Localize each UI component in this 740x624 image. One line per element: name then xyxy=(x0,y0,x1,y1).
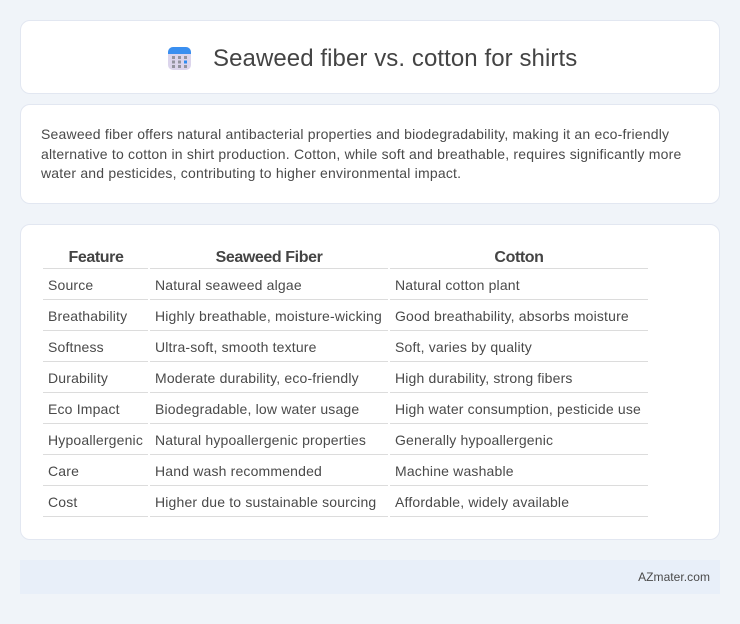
icon: calendar xyxy=(168,47,191,70)
header row xyxy=(68,249,544,266)
row: Softness: Ultra-soft, smooth texture xyxy=(155,339,317,355)
footer brand: AZmater.com xyxy=(638,570,710,584)
title: Seaweed fiber vs. cotton for shirts xyxy=(213,45,577,72)
row: Softness xyxy=(48,339,532,355)
footer bar xyxy=(20,560,720,594)
row: Breathability: Good breathability, absorbs moisture xyxy=(395,308,629,324)
panel: comparison table xyxy=(20,224,720,540)
row: Breathability: Breathability xyxy=(48,308,127,324)
row: Source: Source xyxy=(48,277,93,293)
row: Source xyxy=(48,277,520,293)
row: Care: Machine washable xyxy=(395,463,514,479)
row: Source: Natural seaweed algae xyxy=(155,277,302,293)
row: Breathability xyxy=(48,308,629,324)
row: Durability: Moderate durability, eco-friendly xyxy=(155,370,359,386)
summary paragraph xyxy=(41,126,681,181)
header row: Cotton xyxy=(494,249,544,266)
row: Cost: Affordable, widely available xyxy=(395,494,569,510)
row: Softness: Softness xyxy=(48,339,104,355)
row: Cost xyxy=(48,494,569,510)
header row: Feature xyxy=(68,249,124,266)
row: Eco Impact xyxy=(48,401,641,417)
row: Durability: High durability, strong fibers xyxy=(395,370,573,386)
row: Durability xyxy=(48,370,573,386)
row: Care xyxy=(48,463,514,479)
summary paragraph: alternative to cotton in shirt production. Cotton, while soft and breathable, requires significantly more xyxy=(41,146,681,162)
row: Source: Natural cotton plant xyxy=(395,277,520,293)
row: Durability: Durability xyxy=(48,370,108,386)
panel: title header xyxy=(20,20,720,94)
row: Hypoallergenic: Hypoallergenic xyxy=(48,432,143,448)
row: Hypoallergenic xyxy=(48,432,553,448)
panel: summary text xyxy=(20,104,720,204)
row: Eco Impact: Biodegradable, low water usage xyxy=(155,401,359,417)
summary paragraph: water and pesticides, contributing to higher environmental impact. xyxy=(41,165,461,181)
row: Breathability: Highly breathable, moisture-wicking xyxy=(155,308,382,324)
row: Eco Impact: Eco Impact xyxy=(48,401,120,417)
row: Care: Care xyxy=(48,463,79,479)
row: Softness: Soft, varies by quality xyxy=(395,339,532,355)
row: Care: Hand wash recommended xyxy=(155,463,322,479)
row: Hypoallergenic: Natural hypoallergenic properties xyxy=(155,432,366,448)
row: Cost: Higher due to sustainable sourcing xyxy=(155,494,376,510)
row: Cost: Cost xyxy=(48,494,77,510)
row: Hypoallergenic: Generally hypoallergenic xyxy=(395,432,553,448)
summary paragraph: Seaweed fiber offers natural antibacterial properties and biodegradability, making it an eco-friendly xyxy=(41,126,669,142)
row: Eco Impact: High water consumption, pesticide use xyxy=(395,401,641,417)
header row: Seaweed Fiber xyxy=(216,249,322,266)
